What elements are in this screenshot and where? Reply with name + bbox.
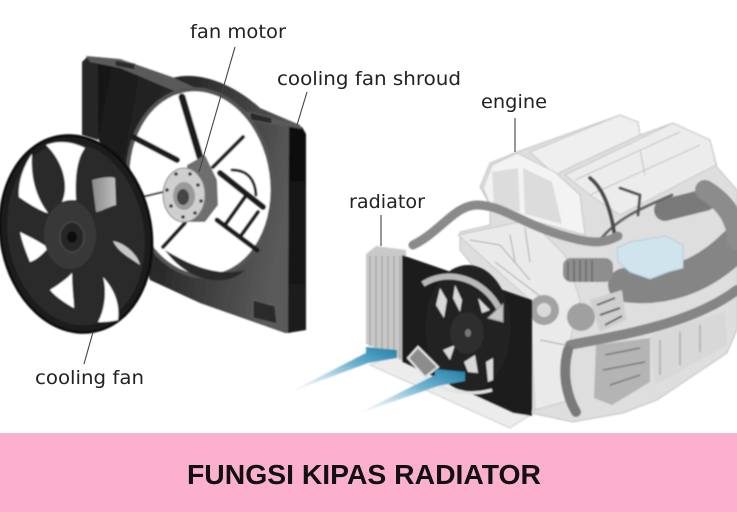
airflow arrow lower — [357, 369, 465, 414]
shroud opening — [116, 80, 284, 286]
small shroud — [402, 255, 532, 416]
label: cooling fan shroud: cooling fan shroud — [277, 68, 461, 90]
radiator floor plate — [370, 352, 535, 428]
engine timing cover — [458, 220, 580, 410]
label: fan motor: fan motor — [190, 21, 286, 43]
engine dark hose band — [413, 178, 737, 412]
mount tabs — [115, 60, 277, 324]
engine front cover — [483, 153, 585, 235]
label: cooling fan: cooling fan — [35, 367, 144, 389]
airflow arrow upper — [290, 347, 397, 392]
fan motor — [163, 155, 218, 222]
curved rotation arrows — [408, 276, 503, 393]
engine coolant reservoir — [617, 236, 683, 279]
spokes — [133, 97, 263, 250]
engine illustration — [413, 115, 737, 422]
shroud side wall right — [288, 126, 306, 333]
fan hub — [44, 201, 96, 269]
dark lower arc of opening — [165, 250, 245, 280]
radiator assembly — [290, 246, 535, 428]
engine body silhouette — [460, 115, 737, 422]
title: FUNGSI KIPAS RADIATOR — [187, 459, 541, 490]
leader lines — [84, 47, 515, 364]
small fan — [425, 265, 511, 391]
large cooling fan — [0, 123, 167, 345]
large cooling fan shroud — [82, 56, 306, 333]
shroud face — [97, 57, 300, 333]
label: radiator: radiator — [349, 191, 425, 213]
shroud top rim — [86, 56, 302, 129]
title band — [0, 433, 737, 512]
engine pulleys and lower parts — [529, 258, 727, 405]
shroud side wall left — [82, 57, 98, 140]
label: engine: engine — [481, 91, 547, 113]
fan ring and blades — [0, 123, 167, 345]
fan gaps — [19, 142, 118, 322]
radiator core — [366, 246, 412, 364]
engine cam covers — [530, 115, 716, 215]
